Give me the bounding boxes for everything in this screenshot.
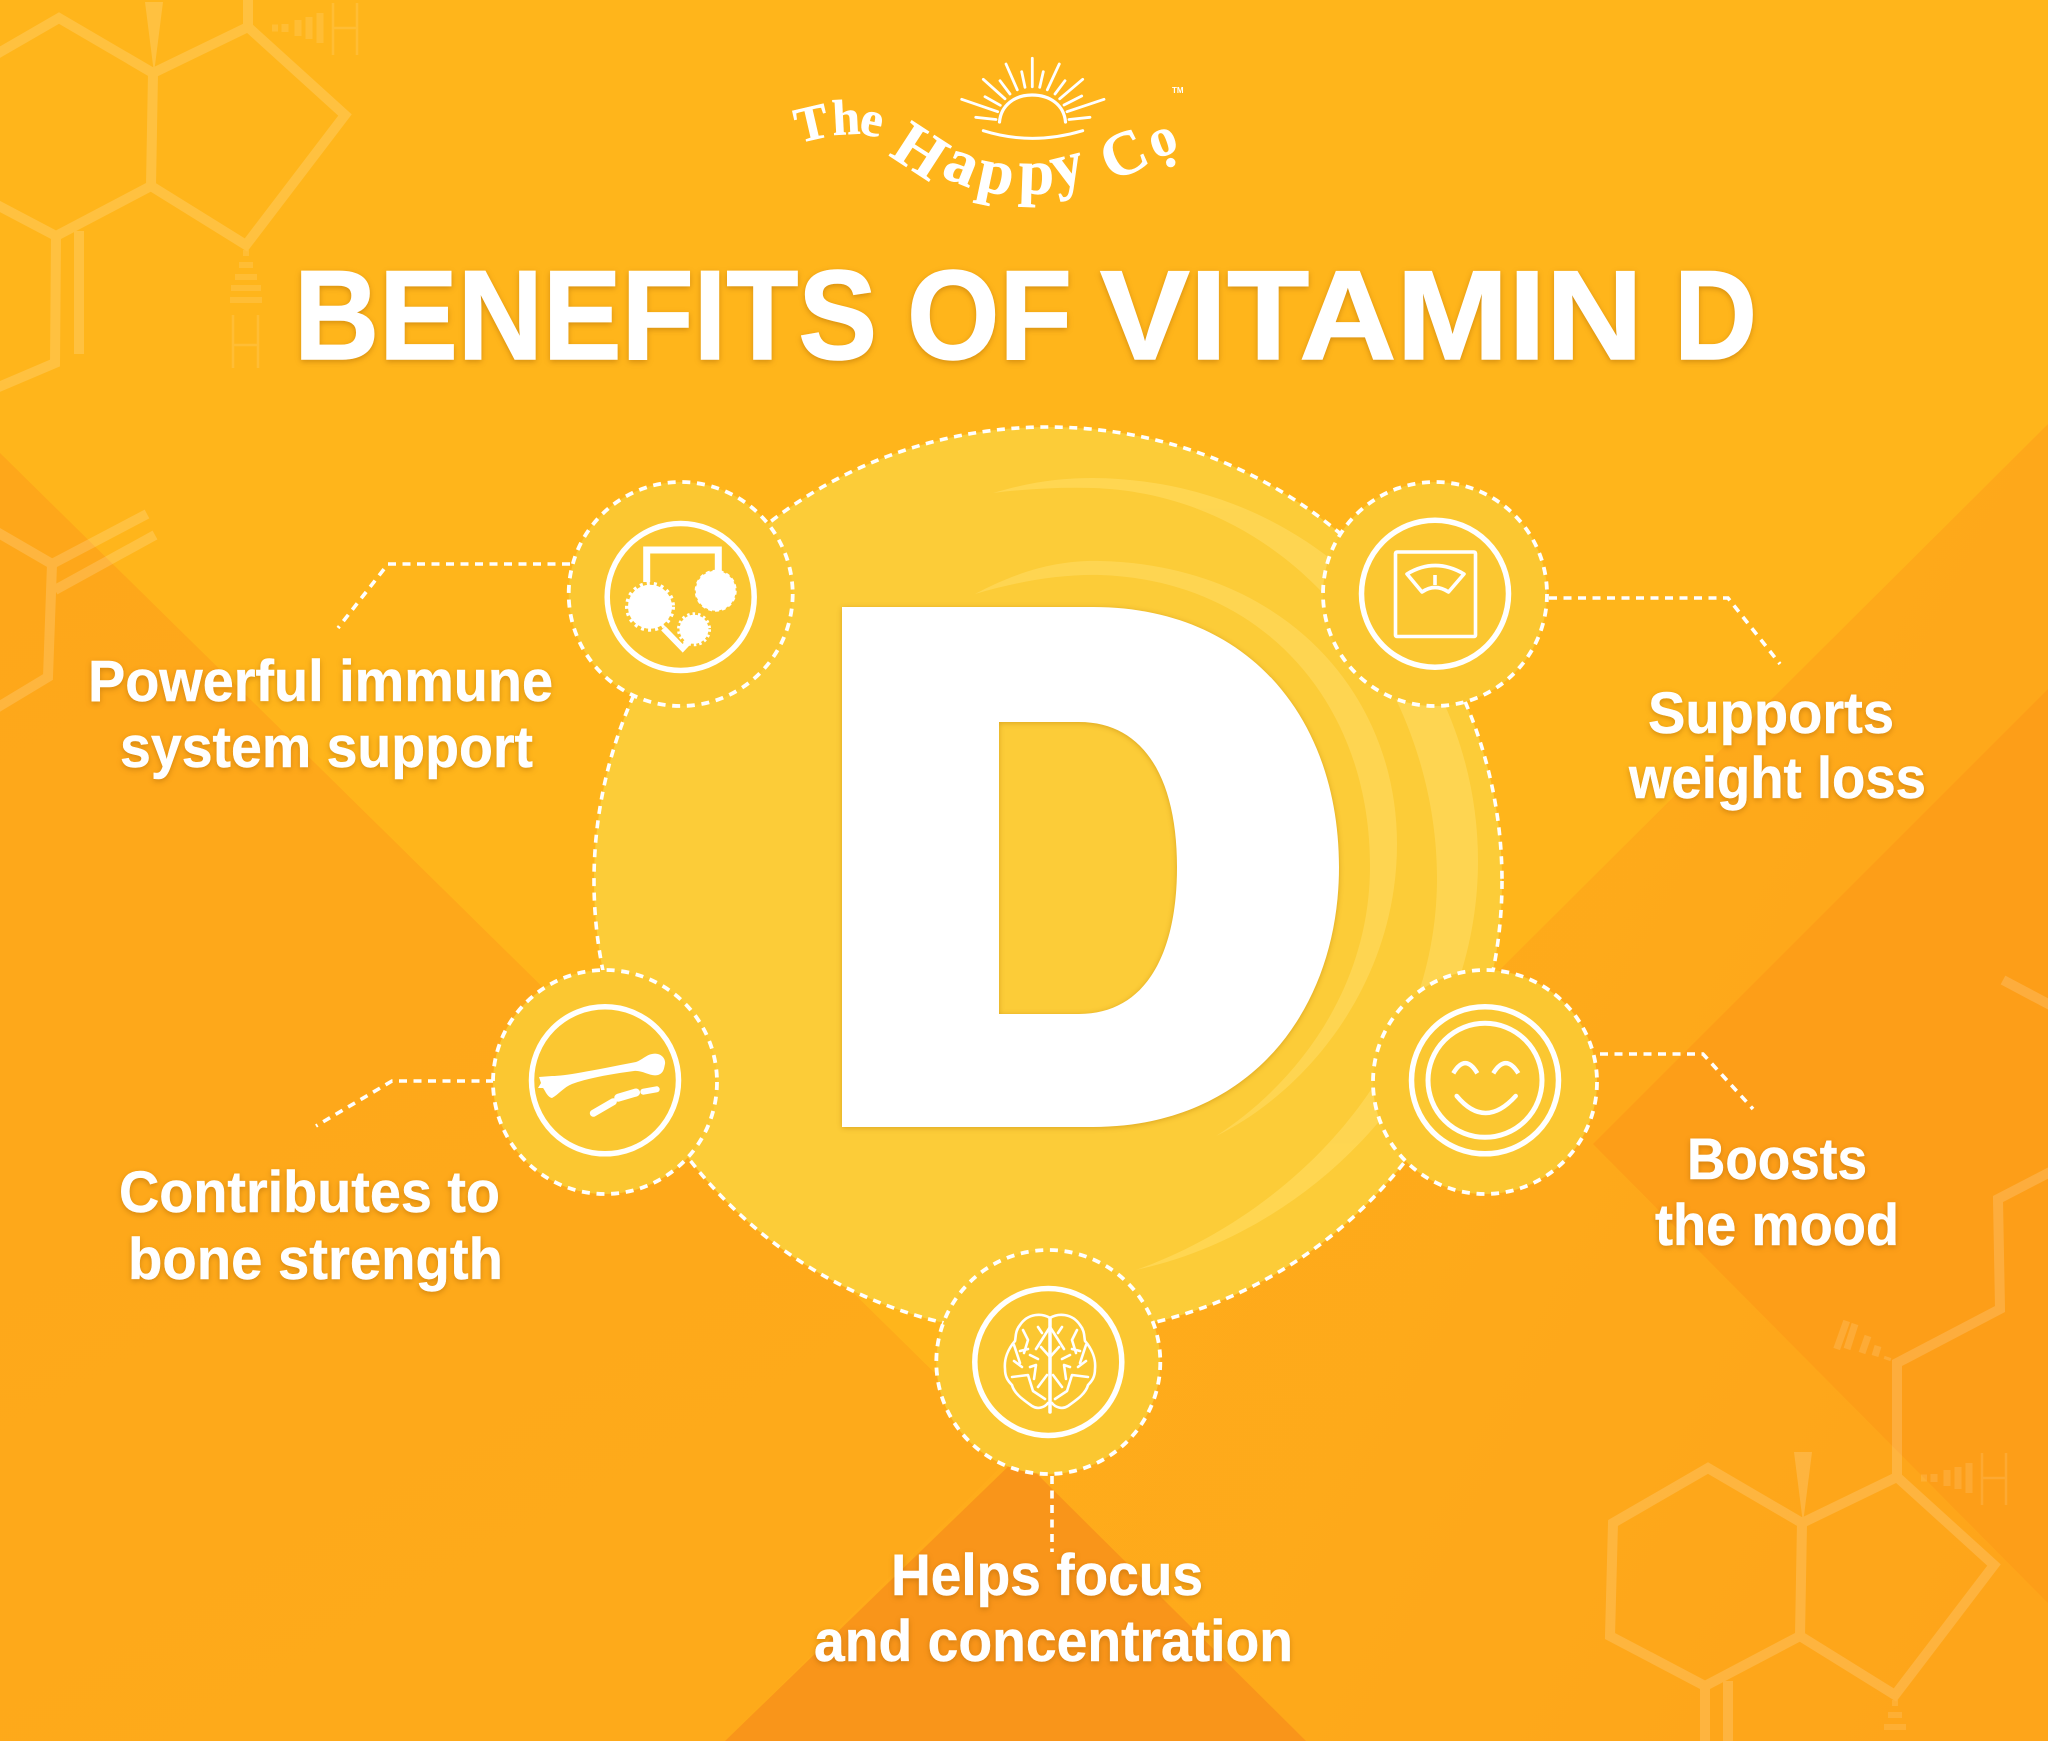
label: immune: system support [120, 715, 533, 780]
label: bone [119, 1160, 503, 1292]
label: mood [1655, 1127, 1899, 1258]
icon: bone [538, 1054, 665, 1113]
logo wordmark: The [789, 89, 889, 154]
label: focus [814, 1543, 1293, 1674]
title: BENEFITS [294, 244, 877, 386]
molecule: left fragment [0, 514, 155, 712]
connector: brain [1050, 1476, 1054, 1552]
logo: The Happy Co: Happy [880, 107, 1090, 210]
molecule: bottom right [1610, 980, 2048, 1741]
bubble: immune system [569, 482, 793, 706]
icon: sun [962, 58, 1104, 138]
label: bone: bone strength [128, 1227, 503, 1292]
label: immune: Powerful immune [88, 649, 553, 714]
label: weight: weight loss [1628, 746, 1926, 811]
title: D [1674, 244, 1757, 386]
bubble: mood [1373, 970, 1597, 1194]
label: focus: Helps focus [891, 1543, 1203, 1608]
connector: mood [1600, 1054, 1753, 1109]
icon: smiley [1428, 1023, 1542, 1137]
bubble: weight scale [1323, 482, 1547, 706]
label: focus: and concentration [814, 1609, 1293, 1674]
logo: The Happy Co: Co. [1089, 105, 1184, 195]
title: VITAMIN [1100, 244, 1643, 386]
big letter D [842, 607, 1339, 1127]
title [294, 244, 1757, 386]
icon: immune cells [627, 550, 736, 648]
connector: weight [1549, 598, 1780, 664]
label: mood: the mood [1655, 1193, 1899, 1258]
logo: The Happy Co [789, 58, 1184, 210]
label: immune [88, 649, 553, 780]
connector: bone [316, 1081, 494, 1126]
bubble: brain [936, 1250, 1160, 1474]
title: OF [907, 244, 1072, 386]
light swooshes [975, 478, 1478, 1270]
label: mood: Boosts [1687, 1127, 1867, 1192]
label: weight: Supports [1648, 681, 1894, 746]
connector: immune [338, 564, 570, 628]
label: weight [1628, 681, 1926, 811]
icon: scale [1396, 552, 1476, 636]
bubble: bone [493, 970, 717, 1194]
trademark: TM [1172, 86, 1184, 95]
label: bone: Contributes to [119, 1160, 500, 1225]
icon: brain [1005, 1315, 1095, 1412]
molecule: top left [0, 0, 357, 395]
central dashed circle [594, 427, 1502, 1335]
